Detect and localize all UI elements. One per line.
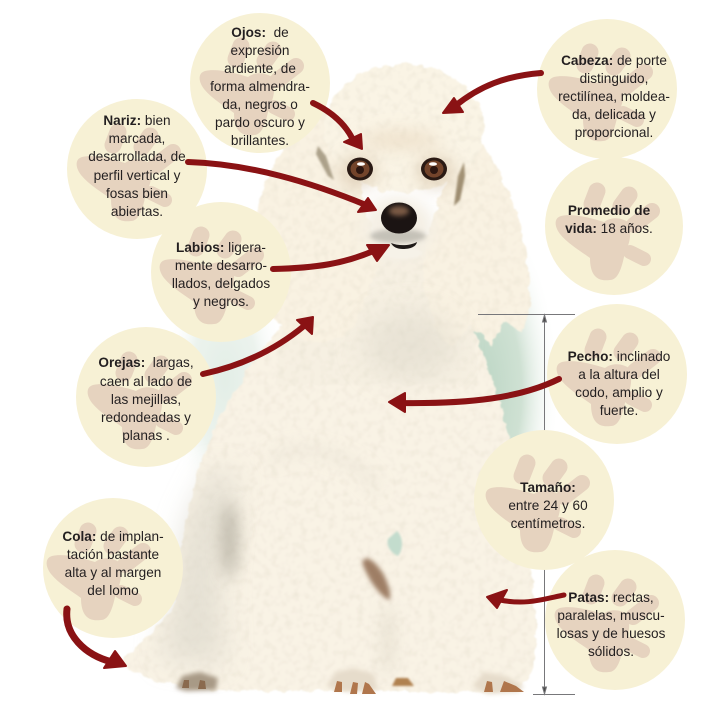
panel: Tamaño (474, 430, 614, 570)
arrow: Nariz to nose (188, 162, 376, 212)
paw watermark (556, 191, 652, 280)
height measure lines (478, 314, 575, 694)
panel: Orejas (76, 327, 216, 467)
text: Nariz: Nariz: bien (103, 113, 171, 128)
body shadows (160, 311, 456, 676)
text: Orejas: planas . (122, 428, 170, 443)
text: Promedio de vida: Promedio de (568, 203, 651, 218)
text: Labios: llados, delgados (172, 276, 270, 291)
text: Pecho: codo, amplio y (575, 385, 663, 400)
body and haunch (120, 320, 536, 692)
paw watermark (549, 52, 645, 141)
panel: Promedio de vida (545, 157, 683, 295)
panel: Ojos (190, 13, 330, 153)
paw watermark (557, 337, 653, 426)
paw watermark (77, 132, 173, 221)
paw watermark (555, 583, 651, 672)
panel: Cabeza (537, 19, 677, 159)
paws with claws (176, 668, 524, 694)
text: Ojos: pardo oscuro y (215, 115, 305, 130)
circle background (190, 13, 330, 153)
arrow: Orejas to ear (203, 317, 313, 374)
paw watermark (200, 46, 296, 135)
panel: Cola (43, 498, 183, 638)
text: Ojos: forma almendra- (210, 79, 310, 94)
circle background (547, 304, 687, 444)
neck (275, 235, 478, 385)
arrow: Labios to lips (273, 245, 389, 269)
circle background (67, 99, 207, 239)
text: Labios: y negros. (193, 294, 249, 309)
circle background (43, 498, 183, 638)
arrow: Cola to tail (67, 609, 126, 668)
ear folds (316, 146, 465, 206)
text: Cabeza: rectilínea, moldea- (558, 89, 670, 104)
text: Patas: losas y de huesos (557, 626, 666, 641)
text: Pecho: a la altura del (578, 367, 660, 382)
mouth (391, 242, 417, 249)
topknot (324, 64, 484, 192)
fur silhouette (120, 64, 536, 692)
panel: Labios (151, 202, 291, 342)
text: Cola: tación bastante (67, 547, 159, 562)
text: Orejas: las mejillas, (111, 392, 181, 407)
text: Tamaño: entre 24 y 60 (508, 498, 588, 513)
arrow: Pecho to chest (389, 379, 559, 412)
text: Ojos: brillantes. (231, 133, 289, 148)
circle background (76, 327, 216, 467)
text: Cola: del lomo (87, 583, 139, 598)
panel: Nariz (67, 99, 207, 239)
text: Orejas: Orejas: largas, (98, 355, 194, 370)
text: Labios: Labios: ligera- (176, 240, 266, 255)
text: Nariz: marcada, (109, 131, 165, 146)
text: Nariz: desarrollada, de (88, 149, 186, 164)
text: Nariz: abiertas. (111, 204, 163, 219)
poodle illustration (120, 64, 536, 694)
arrow: Patas to paw (487, 590, 564, 608)
text: Pecho: Pecho: inclinado (568, 349, 670, 364)
text: Ojos: expresión (231, 43, 289, 58)
text: Orejas: caen al lado de (100, 374, 192, 389)
text: Tamaño: Tamaño: (520, 480, 576, 495)
text: Nariz: fosas bien (106, 186, 168, 201)
text: Pecho: fuerte. (600, 403, 638, 418)
text: Patas: sólidos. (588, 644, 634, 659)
circle background (474, 430, 614, 570)
text: Patas: Patas: rectas, (568, 590, 654, 605)
text: Orejas: redondeadas y (101, 410, 191, 425)
paw watermark (160, 235, 256, 324)
text: Tamaño: centímetros. (511, 516, 585, 531)
text: Ojos: Ojos: de (231, 25, 289, 40)
paw watermark (47, 531, 143, 620)
muzzle (362, 196, 434, 260)
text: Cabeza: da, delicada y (572, 107, 656, 122)
text: Ojos: da, negros o (222, 97, 298, 112)
arrow: Cabeza to head (443, 73, 541, 113)
text: Cabeza: proporcional. (575, 125, 653, 140)
text: Cabeza: Cabeza: de porte (561, 53, 667, 68)
circle background (545, 550, 685, 690)
circle background (537, 19, 677, 159)
panel: Patas (545, 550, 685, 690)
text: Cabeza: distinguido, (580, 71, 648, 86)
text: Patas: paralelas, muscu- (557, 608, 665, 623)
face shading (338, 130, 456, 189)
arrow: Ojos to eyes (313, 103, 362, 149)
paw watermark (486, 463, 582, 552)
panel: Pecho (547, 304, 687, 444)
text: Promedio de vida: vida: 18 años. (565, 221, 653, 236)
circle background (151, 202, 291, 342)
nose (381, 202, 417, 234)
text: Cola: alta y al margen (65, 565, 161, 580)
text: Ojos: ardiente, de (224, 61, 296, 76)
text: Cola: Cola: de implan- (62, 529, 164, 544)
paw watermark (88, 360, 184, 449)
gap between legs (362, 531, 402, 600)
text: Nariz: perfil vertical y (94, 168, 181, 183)
ears (254, 110, 380, 343)
text: Labios: mente desarro- (175, 258, 267, 273)
eyes (347, 158, 447, 180)
circle background (545, 157, 683, 295)
